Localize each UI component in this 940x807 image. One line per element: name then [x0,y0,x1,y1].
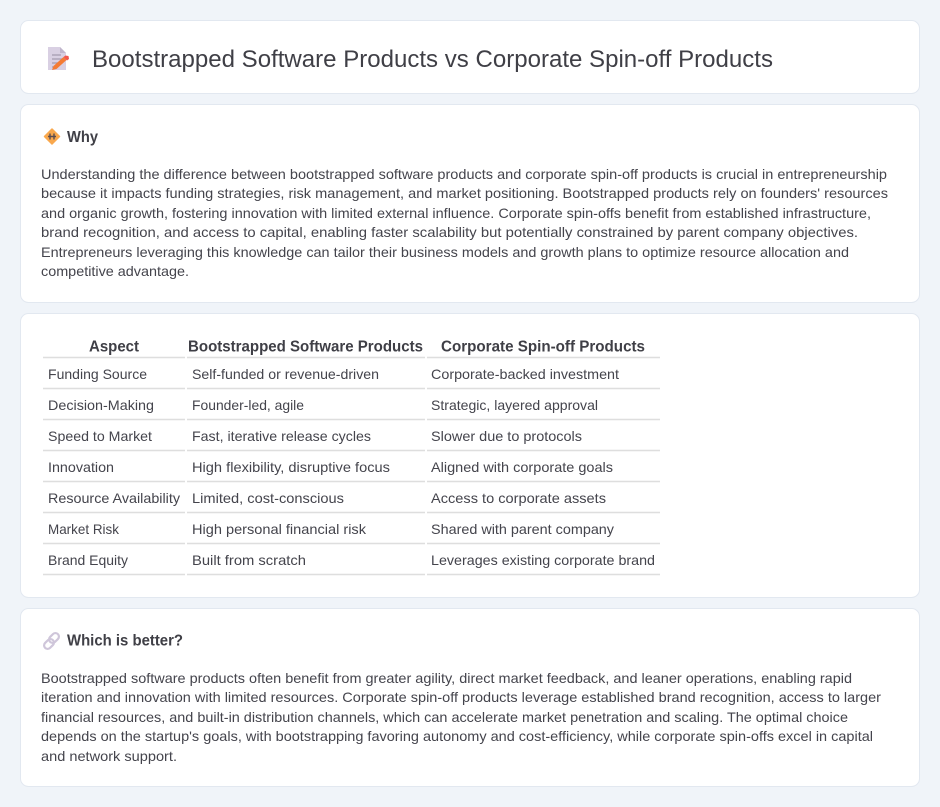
row: market risk [48,521,614,537]
row: market risk: Market Risk [48,521,120,537]
panel: why [20,104,920,302]
text block: why explanation: brand recognition, and access to capital, enabling faster scalability but potentially constrained by parent company objectives. [41,224,858,240]
table header row [89,338,645,356]
heading: why: Why [67,129,98,146]
panel: which is better [20,608,920,786]
icon: document with pencil [48,47,69,70]
row: funding source: Funding Source [48,366,147,382]
row: resource availability: Limited, cost-conscious [192,490,344,506]
row: decision-making [48,397,598,413]
row: funding source: Self-funded or revenue-driven [192,366,379,382]
row: brand equity: Built from scratch [192,552,306,568]
row: resource availability: Access to corporate assets [431,490,606,506]
row: market risk: Shared with parent company [431,521,614,537]
text block: why explanation: and organic growth, fostering innovation with limited external influence. Corporate spin-offs benefit from established infrastructure, [41,205,871,221]
icon: chain link [43,632,60,650]
row: market risk: High personal financial risk [192,521,367,537]
text block: why explanation: Understanding the difference between bootstrapped software products and corporate spin-off products is crucial in entrepreneurship [41,166,887,182]
icon: diamond warning sign [44,129,60,144]
table header row: Bootstrapped Software Products [188,338,423,356]
row: speed to market [48,428,582,444]
text block: why explanation [41,166,888,279]
row: speed to market: Fast, iterative release cycles [192,428,371,444]
row: resource availability: Resource Availability [48,490,180,506]
text block: which is better explanation [41,670,881,764]
row: resource availability [48,490,606,506]
row: brand equity: Leverages existing corporate brand [431,552,655,568]
text block: why explanation: Entrepreneurs leveraging this knowledge can tailor their business models and growth plans to optimize resource allocation and [41,244,849,260]
row: speed to market: Speed to Market [48,428,152,444]
text block: why explanation: because it impacts funding strategies, risk management, and market positioning. Bootstrapped products rely on founders' resources [41,185,888,201]
row: innovation: Innovation [48,459,114,475]
row: brand equity: Brand Equity [48,552,128,568]
text block: which is better explanation: depends on the startup's goals, with bootstrapping favoring autonomy and cost-efficiency, while corporate spin-offs excel in capital [41,728,873,744]
title: Bootstrapped Software Products vs Corporate Spin-off Products [92,46,773,73]
text block: why explanation: competitive advantage. [41,263,189,279]
table header row: Corporate Spin-off Products [441,338,645,356]
row: innovation [48,459,613,475]
row: funding source: Corporate-backed investment [431,366,619,382]
text block: which is better explanation: iteration and innovation with limited resources. Corporate spin-off products leverage established brand recognition, access to larger [41,689,881,705]
row: decision-making: Strategic, layered approval [431,397,598,413]
row: funding source [48,366,619,382]
row: innovation: Aligned with corporate goals [431,459,613,475]
panel: header [20,20,920,94]
heading: which is better: Which is better? [67,632,183,650]
text block: which is better explanation: Bootstrapped software products often benefit from greater agility, direct market feedback, and leaner operations, enabling rapid [41,670,852,686]
row: decision-making: Decision-Making [48,397,154,413]
text block: which is better explanation: financial resources, and built-in distribution channels, which can accelerate market penetration and scaling. The optimal choice [41,709,848,725]
row: speed to market: Slower due to protocols [431,428,582,444]
row: brand equity [48,552,655,568]
row: decision-making: Founder-led, agile [192,397,304,413]
panel: comparison table [20,314,920,598]
row: innovation: High flexibility, disruptive focus [192,459,390,475]
text block: which is better explanation: and network support. [41,748,177,764]
table header row: Aspect [89,338,140,356]
